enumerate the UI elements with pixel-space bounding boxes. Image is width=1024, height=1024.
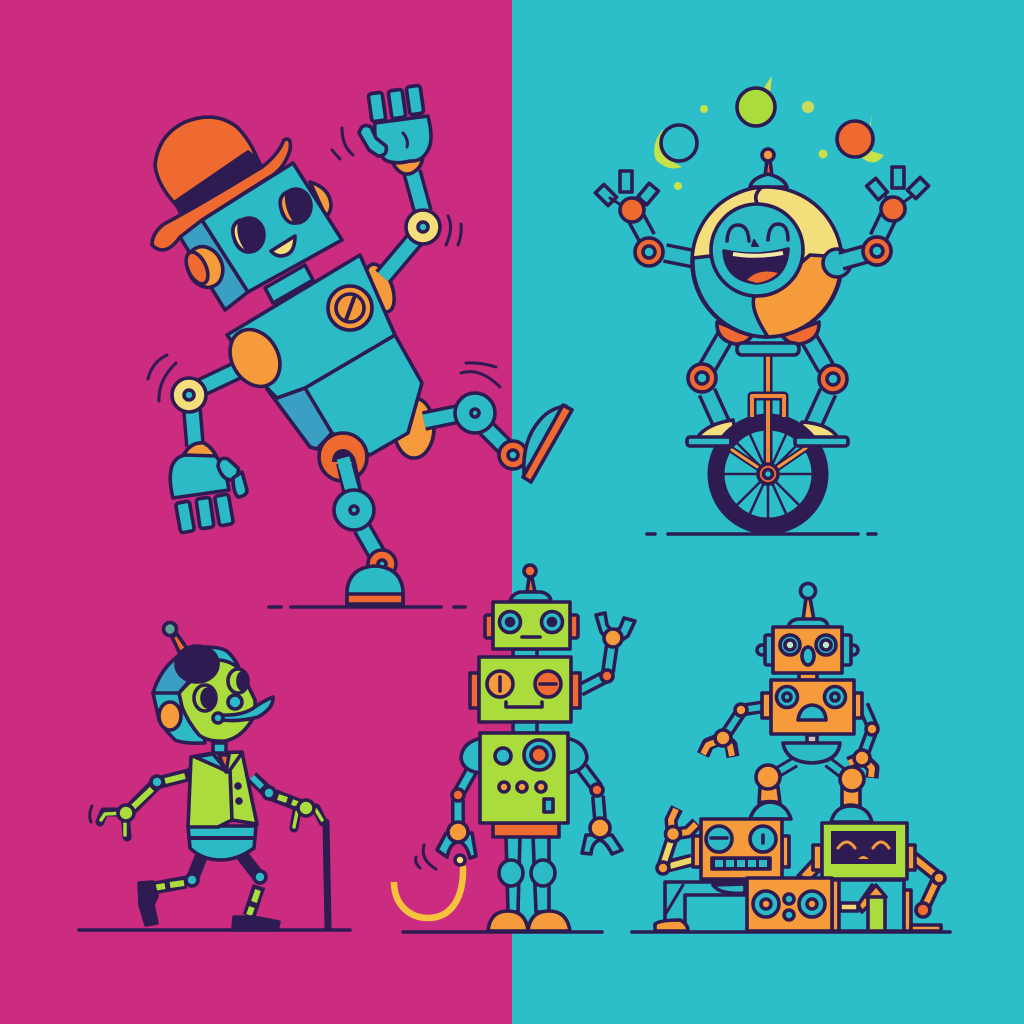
gentleman head — [153, 622, 273, 743]
dancing robot head — [180, 163, 342, 310]
unicycle robot left arm — [595, 171, 695, 266]
dancing robot hat — [152, 117, 290, 250]
unicycle wheel — [716, 422, 820, 526]
stacked robot middle block — [470, 657, 580, 722]
unicycle ground line — [647, 532, 876, 536]
gentleman torso with waistcoat — [188, 752, 257, 860]
stacked robot neck — [513, 722, 537, 733]
gentleman left arm — [90, 766, 202, 837]
gentleman cane — [326, 822, 328, 927]
pyramid bottom right arm — [913, 857, 945, 917]
pyramid second robot — [762, 680, 862, 734]
pyramid bottom right monitor robot — [813, 823, 915, 879]
robot: gentleman robot with cane — [79, 622, 350, 930]
gentleman right arm — [252, 777, 323, 828]
stacked robot antenna — [510, 565, 551, 601]
robot: tall stacked green robot — [394, 565, 635, 932]
unicycle robot right arm — [863, 167, 929, 265]
pyramid waist — [783, 735, 840, 763]
pyramid bottom left robot claw arm — [657, 808, 697, 874]
gentleman legs — [139, 852, 279, 930]
unicycle right elbow — [863, 237, 891, 265]
stacked robot motion lines — [416, 845, 436, 869]
unicycle leg right — [800, 337, 847, 438]
robot: juggling unicycle robot — [595, 76, 929, 534]
stacked robot left arm — [437, 738, 482, 865]
dancing robot right leg — [394, 363, 572, 482]
dancing robot ground line — [269, 605, 465, 609]
stacked robot ground line — [403, 930, 602, 934]
unicycle right shoulder — [823, 249, 866, 277]
pyramid top head — [757, 627, 858, 680]
robot: dancing robot with hat — [148, 85, 572, 607]
dancing robot neck — [265, 265, 313, 303]
stacked robot legs and feet — [488, 836, 570, 931]
dancing robot raised arm — [332, 85, 461, 316]
gentleman neck — [213, 743, 226, 753]
dancing robot standing leg — [319, 433, 403, 604]
unicycle leg left — [688, 337, 737, 438]
pyramid bottom left head — [693, 819, 789, 879]
robot: orange robot pyramid — [632, 584, 950, 932]
dancing robot torso — [220, 255, 422, 455]
pyramid bottom right body — [798, 850, 941, 931]
pyramid top legs — [750, 762, 872, 822]
pyramid bottom centre block — [747, 878, 839, 931]
panel: magenta background — [0, 0, 512, 1024]
unicycle seat — [717, 322, 819, 355]
pyramid second robot arms — [703, 704, 878, 778]
pyramid bottom left table — [655, 882, 750, 931]
panel: teal background — [512, 0, 1024, 1024]
unicycle robot body — [692, 149, 842, 337]
gentleman ground line — [79, 928, 350, 932]
stacked robot lower body — [480, 733, 568, 837]
pyramid ground line — [632, 930, 950, 934]
dancing robot left arm — [148, 355, 255, 533]
stacked robot raised arm — [580, 613, 635, 690]
stacked robot top head — [485, 602, 578, 657]
stacked robot hook — [394, 866, 463, 918]
unicycle pedals — [687, 437, 848, 446]
unicycle seat post and fork — [752, 350, 784, 484]
juggling balls — [654, 76, 884, 190]
pyramid top antenna — [788, 584, 828, 627]
stacked robot right arm — [566, 738, 622, 854]
